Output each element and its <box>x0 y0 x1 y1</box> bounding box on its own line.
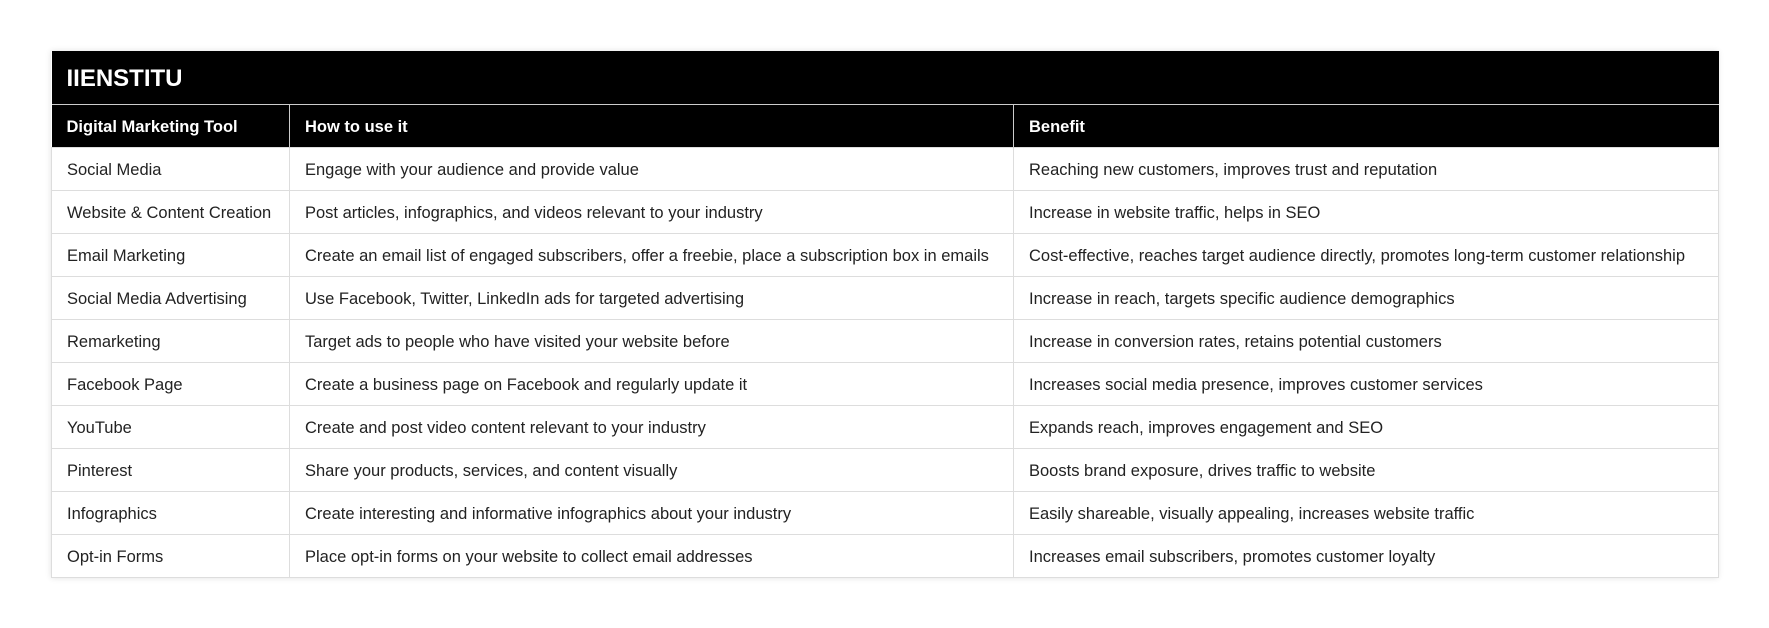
table: Engage with your audience and provide value <box>305 161 639 179</box>
table: Facebook Page <box>67 376 183 394</box>
table: Increase in reach, targets specific audience demographics <box>1029 290 1455 308</box>
table: Create interesting and informative infographics about your industry <box>305 505 791 523</box>
table: Share your products, services, and content visually <box>305 462 677 480</box>
header row: Digital Marketing Tool <box>66 118 238 136</box>
table: Website & Content Creation <box>67 204 271 222</box>
table: Create and post video content relevant to your industry <box>305 419 706 437</box>
table: Target ads to people who have visited your website before <box>305 333 730 351</box>
table: Increase in website traffic, helps in SEO <box>1029 204 1320 222</box>
title: IIENSTITU <box>66 65 183 92</box>
table: Create an email list of engaged subscribers, offer a freebie, place a subscription box in emails <box>305 247 989 265</box>
table <box>51 51 1718 578</box>
header row <box>52 105 1719 147</box>
table: Easily shareable, visually appealing, increases website traffic <box>1029 505 1474 523</box>
table: Remarketing <box>67 333 161 351</box>
table: Place opt-in forms on your website to collect email addresses <box>305 548 753 566</box>
header row: Benefit <box>1029 118 1085 136</box>
table: YouTube <box>67 419 132 437</box>
table: Increases email subscribers, promotes customer loyalty <box>1029 548 1435 566</box>
table: Opt-in Forms <box>67 548 163 566</box>
table: Increase in conversion rates, retains potential customers <box>1029 333 1442 351</box>
table: Social Media <box>67 161 161 179</box>
table: Post articles, infographics, and videos relevant to your industry <box>305 204 763 222</box>
table: Boosts brand exposure, drives traffic to website <box>1029 462 1375 480</box>
table: Infographics <box>67 505 157 523</box>
table: Pinterest <box>67 462 132 480</box>
table: Expands reach, improves engagement and SEO <box>1029 419 1383 437</box>
table: Email Marketing <box>67 247 185 265</box>
table: Social Media Advertising <box>67 290 247 308</box>
table: Create a business page on Facebook and regularly update it <box>305 376 747 394</box>
table: Reaching new customers, improves trust and reputation <box>1029 161 1437 179</box>
table: Increases social media presence, improves customer services <box>1029 376 1483 394</box>
header row: How to use it <box>305 118 408 136</box>
table: Cost-effective, reaches target audience directly, promotes long-term customer relationship <box>1029 247 1685 265</box>
table: Use Facebook, Twitter, LinkedIn ads for targeted advertising <box>305 290 744 308</box>
